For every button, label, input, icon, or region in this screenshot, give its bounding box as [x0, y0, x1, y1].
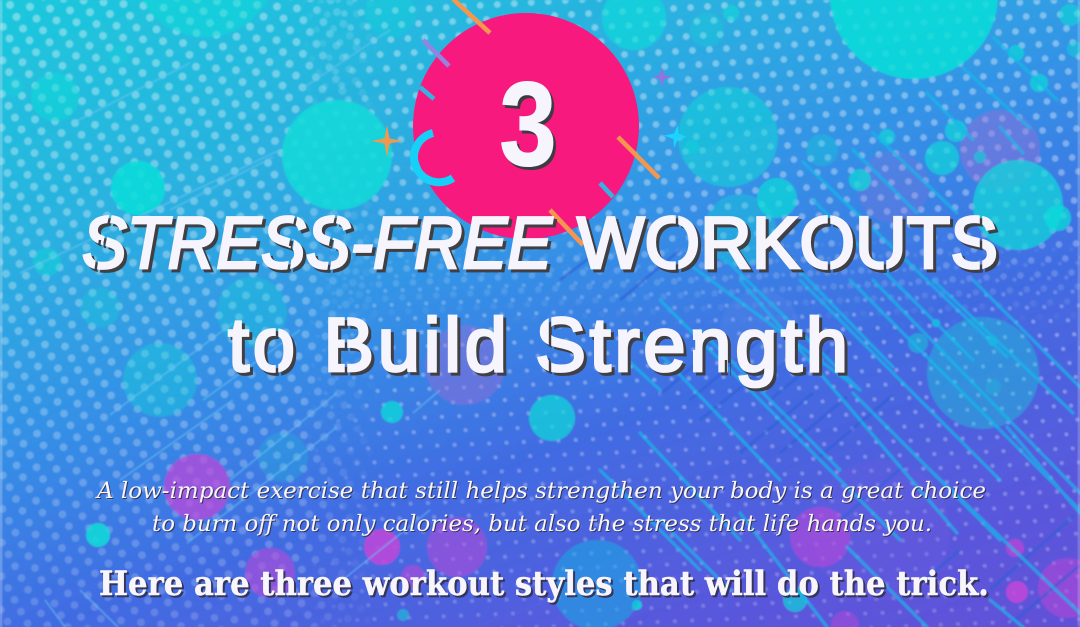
accent lines — [420, 0, 659, 245]
title — [82, 203, 998, 388]
title line 1: STRESS-FREE — [82, 203, 553, 284]
title line 1 — [82, 215, 1000, 273]
intro paragraph — [95, 478, 986, 537]
intro paragraph: A low-impact exercise that still helps strengthen your body is a great choice — [95, 478, 986, 504]
call to action line: Here are three workout styles that will do the trick. — [99, 564, 989, 604]
intro paragraph: to burn off not only calories, but also the stress that life hands you. — [152, 511, 932, 537]
title line 1: WORKOUTS — [577, 203, 998, 284]
orange sparkle — [371, 125, 403, 157]
numeral 3: 3 — [499, 57, 557, 191]
cyan crescent arc — [414, 133, 453, 182]
purple sparkle — [652, 67, 672, 87]
blue sparkle — [664, 125, 687, 148]
pink circle — [413, 13, 639, 239]
title line 2: to Build Strength — [228, 303, 848, 388]
badge: pink circle with accent marks — [371, 0, 687, 245]
